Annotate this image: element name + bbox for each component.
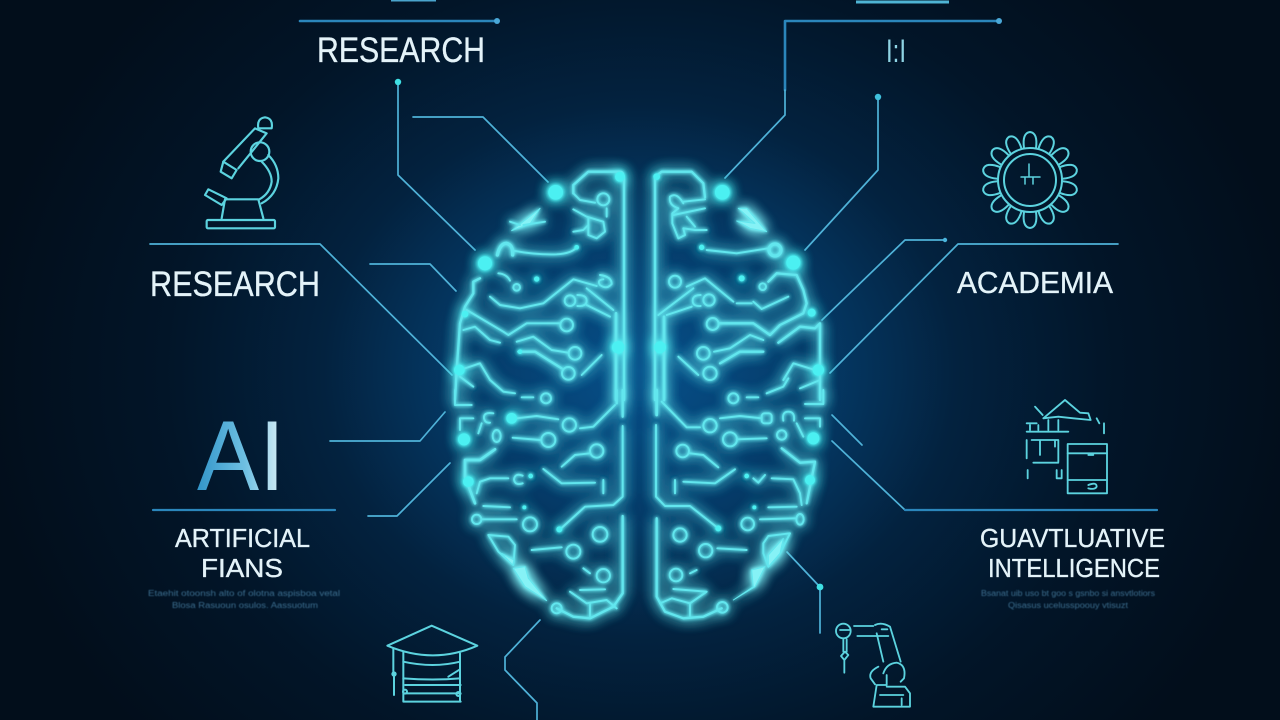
text: right caption: Qisasus ucelusspoouy vtisuzt [1008,601,1129,610]
heading: intelligence: INTELLIGENCE [988,553,1160,583]
text: right caption [981,589,1155,610]
left lobe lower [455,390,623,618]
icon: microscope [205,117,278,228]
icon: top left partial [391,0,436,2]
text: left caption: Etaehit otoonsh alto of olotna aspisboa vetal [148,589,340,598]
text: left caption [148,589,340,610]
left lobe upper [454,172,625,400]
heading: guavtluative: GUAVTLUATIVE [980,523,1165,553]
icon: laboratory equipment [1027,400,1107,493]
icon: academia gear [982,132,1078,228]
brain circuit [454,172,824,618]
right lobe lower [656,390,823,618]
text: left caption: Blosa Rasuoun osulos. Aassuotum [172,601,318,610]
text: top right glyphs: I:I [886,33,906,69]
heading: academia: ACADEMIA [957,265,1113,300]
right lobe upper [653,172,824,403]
connector lines [150,18,1157,720]
heading: AI: AI [197,400,285,511]
icon: graduation cap [387,626,477,702]
heading: artificial: ARTIFICIAL [175,523,310,553]
heading: top research: RESEARCH [317,31,485,70]
heading: left research: RESEARCH [150,265,320,304]
heading: fians: FIANS [201,553,283,583]
icon: robot arm [836,624,910,707]
text: right caption: Bsanat uib uso bt goo s gsnbo si ansvtlotiors [981,589,1155,598]
icon: top right partial [856,0,949,4]
